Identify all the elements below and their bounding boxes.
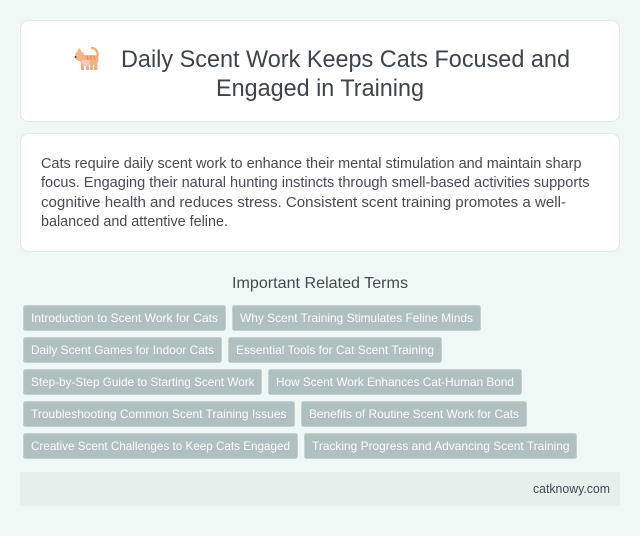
tag: human bond (268, 370, 522, 394)
tag: troubleshooting: Troubleshooting Common Scent Training Issues (31, 407, 286, 421)
summary text: focus. Engaging their natural hunting instincts through smell-based activities supports (41, 175, 590, 191)
title: Engaged in Training (216, 75, 424, 102)
tag: creative challenges: Creative Scent Challenges to Keep Cats Engaged (31, 439, 290, 453)
tag: tracking progress (304, 434, 576, 458)
tag: creative challenges (24, 434, 298, 458)
summary text: balanced and attentive feline. (41, 214, 228, 230)
tag: essential tools (228, 338, 442, 362)
tag: daily games (24, 338, 222, 362)
tag: troubleshooting (24, 402, 294, 426)
tag: introduction (24, 306, 226, 330)
panel: summary card (20, 134, 620, 252)
summary text: Cats require daily scent work to enhance their mental stimulation and maintain sharp (41, 156, 582, 172)
tag: daily games: Daily Scent Games for Indoor Cats (31, 343, 214, 357)
tag: benefits (302, 402, 526, 426)
tag: why scent training: Why Scent Training Stimulates Feline Minds (240, 311, 473, 325)
related terms tags (24, 306, 576, 458)
panel: title card (20, 20, 620, 122)
tag: benefits: Benefits of Routine Scent Work for Cats (309, 407, 519, 421)
tag: why scent training (232, 306, 480, 330)
tag: introduction: Introduction to Scent Work for Cats (31, 311, 218, 325)
tag: essential tools: Essential Tools for Cat Scent Training (236, 343, 434, 357)
title (121, 46, 570, 102)
tag: tracking progress: Tracking Progress and Advancing Scent Training (312, 439, 570, 453)
title: Daily Scent Work Keeps Cats Focused and (121, 46, 570, 73)
footer (20, 472, 620, 506)
summary text: cognitive health and reduces stress. Consistent scent training promotes a well- (41, 195, 566, 211)
summary text (41, 156, 590, 230)
heading: related terms: Important Related Terms (232, 275, 408, 292)
tag: human bond: How Scent Work Enhances Cat-Human Bond (276, 375, 514, 389)
tag: step-by-step: Step-by-Step Guide to Starting Scent Work (31, 375, 255, 389)
icon: orange cat (74, 48, 98, 70)
footer source: catknowy.com (533, 482, 610, 496)
tag: step-by-step (24, 370, 262, 394)
